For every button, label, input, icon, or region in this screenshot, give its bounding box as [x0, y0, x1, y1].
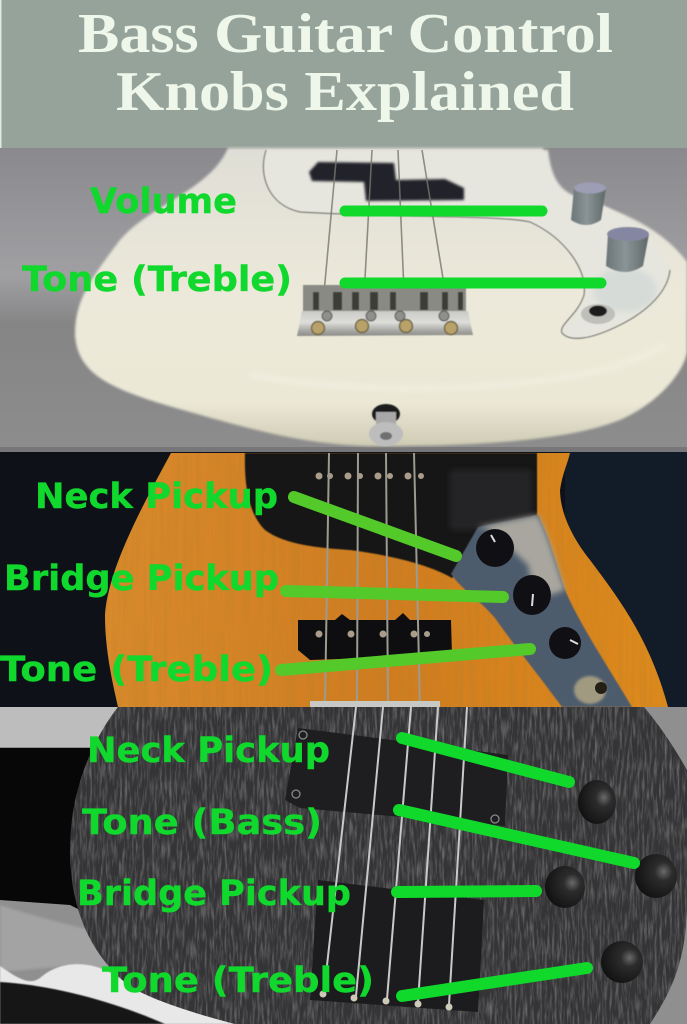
pickguard	[263, 150, 670, 338]
grey cloth	[0, 905, 125, 975]
bridge pickup	[298, 613, 452, 660]
output jack	[581, 304, 615, 324]
title: Bass Guitar Control	[78, 3, 613, 65]
callout: neck pickup: Neck Pickup	[87, 731, 330, 771]
title: Knobs Explained	[116, 61, 574, 123]
strings	[322, 150, 449, 315]
header panel	[0, 0, 687, 148]
orange body	[105, 453, 668, 707]
callout: tone bass	[82, 803, 634, 863]
callout: tone treble: Tone (Treble)	[0, 650, 273, 690]
neck pickup	[285, 728, 508, 826]
strings	[324, 707, 467, 1005]
pickups	[309, 162, 464, 201]
fur and case	[0, 964, 235, 1024]
callout: tone treble	[0, 649, 530, 690]
title	[78, 3, 613, 123]
neck pickup pole pieces	[316, 472, 424, 480]
panel: white bass guitar photo	[0, 148, 687, 452]
bridge	[297, 285, 473, 336]
dark case background	[0, 748, 120, 920]
guitar body	[70, 707, 687, 1024]
callout: neck pickup	[87, 731, 569, 782]
callout: tone treble: Tone (Treble)	[22, 260, 292, 300]
knobs	[545, 780, 677, 983]
panel: natural jazz bass photo	[0, 452, 687, 707]
volume knob	[571, 182, 606, 225]
strings	[325, 453, 420, 707]
callout: neck pickup	[35, 477, 456, 556]
panel: black bass guitar photo	[0, 707, 687, 1024]
guitar body	[75, 148, 687, 446]
callout: neck pickup: Neck Pickup	[35, 477, 278, 517]
callout: volume: Volume	[90, 182, 237, 222]
knobs	[476, 529, 581, 659]
callout: tone treble	[102, 961, 587, 1001]
control plate	[451, 515, 632, 707]
callout: tone bass: Tone (Bass)	[82, 803, 322, 843]
callout: bridge pickup: Bridge Pickup	[4, 559, 279, 599]
tone knob	[606, 227, 649, 272]
callout: tone treble: Tone (Treble)	[102, 961, 374, 1001]
callout: bridge pickup: Bridge Pickup	[77, 874, 351, 914]
bridge edge	[310, 701, 440, 707]
strap button	[369, 404, 403, 446]
bridge	[310, 880, 484, 1012]
black pickguard	[245, 453, 537, 578]
callout: bridge pickup	[4, 559, 503, 599]
